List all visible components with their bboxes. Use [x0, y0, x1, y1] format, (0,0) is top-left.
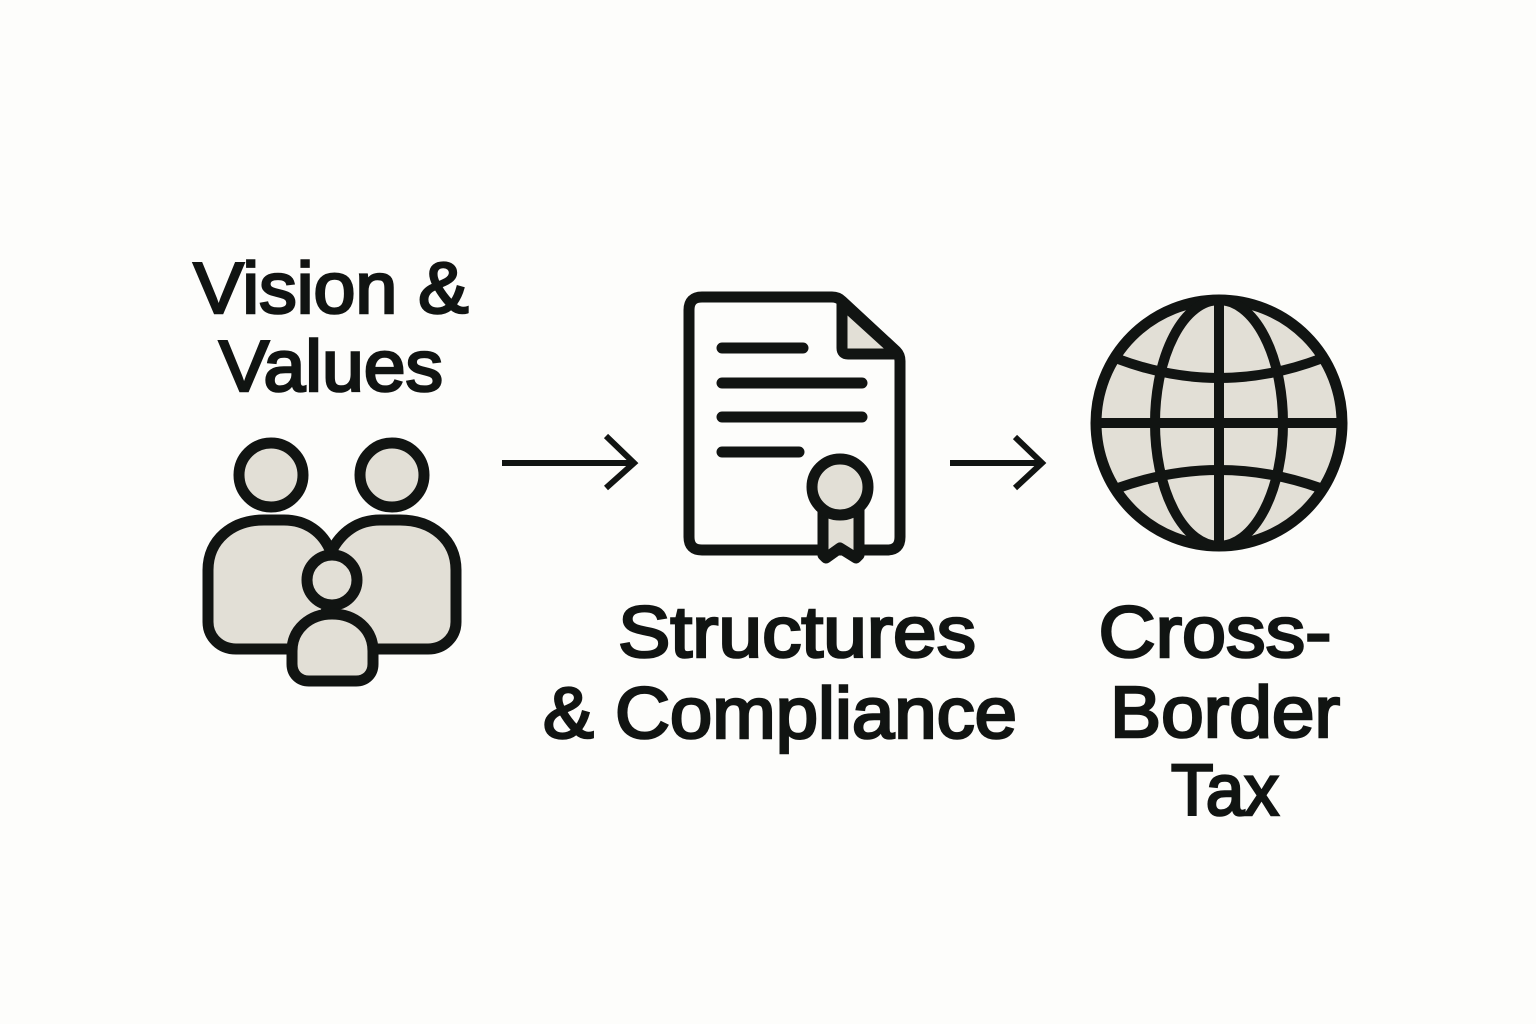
heading: Structures & Compliance: Structures	[618, 593, 976, 673]
heading: Cross-Border Tax: Cross-	[1098, 593, 1332, 673]
heading: Cross-Border Tax	[1098, 593, 1340, 831]
heading: Cross-Border Tax: Border	[1110, 673, 1340, 753]
heading: Cross-Border Tax: Tax	[1171, 751, 1279, 831]
heading: Vision & Values: Values	[219, 327, 443, 407]
arrow: vision to structures	[502, 436, 634, 488]
heading: Structures & Compliance: & Compliance	[543, 674, 1017, 754]
icon: family	[208, 443, 456, 681]
heading: Vision & Values	[194, 249, 468, 407]
heading: Structures & Compliance	[543, 593, 1017, 754]
icon: globe	[1096, 300, 1342, 546]
heading: Vision & Values: Vision &	[194, 249, 468, 329]
arrow: structures to tax	[950, 437, 1042, 488]
icon: certified document	[689, 297, 900, 558]
